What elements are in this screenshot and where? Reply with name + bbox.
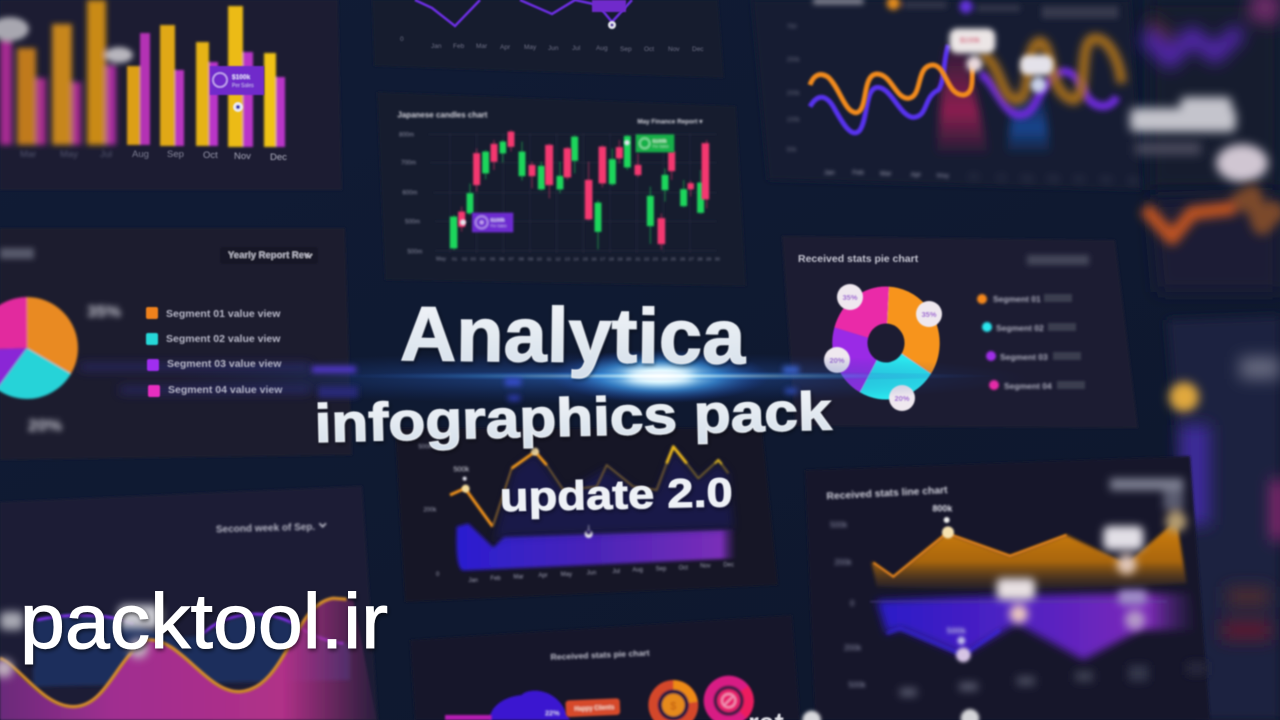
- axis labels: [830, 520, 866, 689]
- heading: Received stats pie chart: [798, 253, 919, 265]
- x axis labels: 24: [662, 257, 668, 262]
- tooltip: Per Sales: [232, 83, 254, 89]
- axis labels: May: [524, 44, 537, 51]
- orange ring icon: $: [670, 700, 677, 712]
- tooltip: $100k: [232, 74, 250, 81]
- marker: [592, 0, 626, 29]
- orange tooltip: Happy Clients: [574, 705, 615, 713]
- report dropdown: May Finance Report ▾: [637, 118, 703, 125]
- pink ring icon: [704, 676, 754, 720]
- x axis labels: 13: [565, 257, 570, 262]
- right blurred labels: [1222, 587, 1272, 640]
- axis labels: Apr: [500, 44, 511, 51]
- axis labels: Nov: [700, 564, 711, 570]
- x axis labels: 28: [697, 257, 703, 262]
- markers: 500k: [453, 465, 470, 474]
- bubbles: [824, 284, 942, 411]
- x axis labels: 06: [499, 257, 505, 262]
- x axis labels: 05: [490, 257, 496, 262]
- axis labels: 500k: [830, 520, 847, 529]
- red candles: [458, 130, 709, 249]
- month labels: Dec: [270, 152, 287, 163]
- marker: [932, 504, 954, 538]
- axis labels: Jul: [612, 569, 620, 575]
- x axis labels: [824, 169, 950, 179]
- percent label: 22%: [545, 708, 560, 717]
- orange line: [810, 63, 973, 113]
- legend: Segment 02 value view: [166, 333, 281, 345]
- bars left blurred: [0, 0, 133, 145]
- dropdown: [220, 247, 318, 264]
- bubbles: 35%: [842, 293, 858, 302]
- legend value blurs: [1044, 294, 1085, 389]
- y axis labels: 200k: [787, 91, 800, 97]
- axis labels: Oct: [644, 46, 654, 53]
- x axis labels: 26: [680, 257, 686, 262]
- purple area: [877, 593, 1197, 660]
- x axis labels: 30: [715, 257, 720, 262]
- tooltip: [210, 66, 264, 112]
- panel: top right smooth line chart: Sep: [1047, 176, 1059, 183]
- chevron: [319, 523, 326, 527]
- panel: received stats line chart: [802, 456, 1272, 720]
- blurred heading: [0, 248, 34, 259]
- y axis labels: [787, 24, 800, 154]
- x axis labels: 20: [626, 257, 632, 262]
- panel: top right smooth line chart: Dec: [1128, 177, 1141, 184]
- y axis labels: 50k: [787, 148, 796, 154]
- bubbles: 35%: [921, 310, 937, 319]
- blurred bubble: [1216, 144, 1268, 182]
- axis labels: Jun: [587, 570, 596, 576]
- x axis labels: 18: [609, 257, 614, 262]
- x axis labels: 14: [573, 257, 579, 262]
- panel: top right smooth line chart: Jul: [997, 174, 1006, 181]
- x axis labels: 07: [509, 257, 514, 262]
- axis labels: 200k: [844, 644, 861, 653]
- watermark: packtool.ir: [20, 577, 388, 665]
- panel: Japanese candles chart: [377, 92, 746, 286]
- month labels: Nov: [234, 151, 251, 162]
- x axis labels: 01: [452, 257, 458, 262]
- markers: [453, 448, 593, 538]
- x axis labels: Jan: [824, 169, 835, 176]
- x axis labels: 11: [547, 257, 552, 262]
- purple line: [415, 0, 632, 26]
- dropdown label: Second week of Sep.: [216, 522, 316, 535]
- axis labels: Jul: [572, 45, 581, 52]
- axis labels: May: [561, 572, 572, 578]
- panel: right blurred panels: [1130, 0, 1280, 720]
- purple tooltip: Per Sales: [491, 224, 507, 228]
- y axis labels: 500m: [405, 219, 420, 225]
- month labels: Mar: [20, 149, 36, 160]
- percentages: 35%: [87, 302, 121, 321]
- heading: Received stats pie chart: [550, 648, 650, 662]
- x axis labels: 04: [480, 257, 486, 262]
- x axis labels: 19: [617, 257, 623, 262]
- axis labels: Aug: [596, 45, 608, 52]
- x axis labels: 22: [644, 257, 650, 262]
- percentages: 20%: [28, 416, 62, 435]
- purple tooltip: [460, 213, 513, 232]
- x axis labels: 10: [537, 257, 542, 262]
- streak lines: [80, 364, 310, 393]
- legend: Segment 03 value view: [167, 358, 282, 370]
- x axis blurred labels: [900, 662, 1207, 696]
- title: Analytica: Analytica: [400, 291, 747, 381]
- donut: [836, 290, 936, 396]
- grid lines: [428, 133, 717, 253]
- x axis labels: 21: [635, 257, 641, 262]
- pink area: [0, 598, 377, 720]
- panel: top purple line chart: [372, 0, 724, 78]
- dark blue area behind: [32, 614, 350, 687]
- purple tooltip: $100k: [491, 217, 505, 223]
- orange ring icon: [648, 680, 698, 720]
- flare streak dashes: [312, 366, 799, 401]
- blurred column: [1180, 357, 1280, 540]
- x axis labels: [436, 256, 720, 262]
- axis labels: 500k: [418, 444, 431, 450]
- bubbles: 20%: [894, 394, 910, 403]
- legend: [813, 0, 1118, 19]
- x axis labels: May: [436, 256, 446, 262]
- panel: received stats donut: [782, 236, 1138, 428]
- month labels: Aug: [132, 149, 149, 160]
- dropdown: Yearly Report Rev.: [228, 250, 311, 261]
- axis labels: Dec: [723, 562, 734, 568]
- white bubbles: [997, 478, 1187, 630]
- lower marker: 500k: [947, 625, 966, 635]
- bubbles: [949, 28, 1053, 93]
- panel: yearly report pie: [0, 228, 352, 460]
- month labels: Jul: [100, 149, 112, 160]
- y axis labels: 100k: [787, 118, 800, 124]
- bubbles: 20%: [829, 356, 845, 365]
- blue line: [887, 628, 1000, 655]
- axis labels: Mar: [513, 575, 524, 581]
- purple line: [37, 614, 343, 643]
- panel: top right smooth line chart: $100k: [960, 36, 980, 45]
- panel: top right smooth line chart: Jun: [968, 173, 979, 180]
- y axis labels: 250k: [787, 58, 800, 64]
- x axis labels: 25: [671, 257, 676, 262]
- x axis labels: 15: [583, 257, 588, 262]
- legend: Segment 04: [1004, 381, 1052, 391]
- legend: Segment 01 value view: [166, 308, 281, 320]
- axis labels: [418, 444, 734, 584]
- bars right: [127, 6, 285, 147]
- month labels: Sep: [167, 149, 184, 160]
- orange line: [450, 447, 728, 527]
- axis labels: Oct: [679, 565, 688, 571]
- blurred sub heading: [1135, 142, 1201, 155]
- legend: Segment 04 value view: [168, 384, 283, 396]
- y axis labels: 700m: [401, 161, 416, 167]
- orange area: [872, 520, 1187, 589]
- orange tooltip: [565, 698, 620, 717]
- dark blue glow: [493, 450, 733, 543]
- axis labels: Aug: [632, 568, 643, 574]
- chart title: Received stats line chart: [826, 485, 948, 502]
- bottom dots: [802, 709, 979, 720]
- green tooltip: $100k: [653, 138, 667, 144]
- x axis labels: Apr: [911, 172, 922, 179]
- x axis labels: 09: [528, 257, 534, 262]
- lower marker: [947, 625, 971, 662]
- month labels: Oct: [203, 150, 218, 161]
- blurred orange wave: [1145, 195, 1280, 238]
- chart title: Japanese candles chart: [397, 111, 488, 120]
- x axis labels: May: [937, 172, 950, 179]
- panel: bottom left wave: [0, 486, 378, 720]
- x axis labels: 23: [653, 257, 658, 262]
- green tooltip: Per Sales: [653, 144, 669, 148]
- percentages: [28, 302, 121, 435]
- purple area: [456, 523, 735, 571]
- axis labels: Jan: [468, 578, 478, 584]
- x axis labels: 17: [600, 257, 606, 262]
- axis labels: Dec: [692, 46, 704, 53]
- x axis labels: 02: [462, 257, 468, 262]
- panel: top right smooth line chart: Aug: [1021, 175, 1033, 182]
- axis labels: Jun: [548, 45, 559, 52]
- legend: Segment 02: [996, 323, 1044, 333]
- green candles: [450, 135, 704, 250]
- panel: top right smooth line chart: [752, 0, 1142, 190]
- y axis labels: [399, 132, 422, 255]
- axis labels: Jan: [431, 43, 442, 50]
- axis labels: 200k: [423, 508, 436, 514]
- x axis labels: 12: [555, 257, 561, 262]
- panel: top right smooth line chart: Nov: [1101, 177, 1113, 184]
- zero line: [870, 601, 1167, 602]
- x axis labels: Feb: [852, 170, 864, 177]
- x axis labels: Mar: [880, 171, 892, 178]
- x axis labels: 03: [471, 257, 476, 262]
- blurred chart lines: [1145, 5, 1280, 60]
- axis labels: 0: [436, 572, 440, 578]
- month labels: [20, 149, 287, 163]
- axis labels: Mar: [476, 43, 488, 50]
- axis labels: 0: [850, 599, 855, 608]
- y axis labels: 800m: [399, 132, 414, 138]
- orange line: [873, 533, 1067, 577]
- panel: top right smooth line chart: Oct: [1074, 176, 1085, 183]
- axis labels: 0: [400, 36, 404, 43]
- axis labels: 500k: [848, 680, 866, 689]
- pie: [0, 312, 63, 384]
- axis labels: Apr: [538, 573, 548, 579]
- month labels: May: [60, 149, 78, 160]
- legend: [146, 307, 283, 397]
- purple line: [810, 45, 948, 133]
- dropdown: [1027, 255, 1089, 265]
- magenta fan: [445, 715, 492, 720]
- axis labels: Sep: [656, 567, 667, 573]
- blurred white heading: [1130, 97, 1236, 132]
- marker: 800k: [932, 504, 952, 514]
- axis labels: Feb: [490, 576, 501, 582]
- axis labels: Nov: [668, 46, 680, 53]
- subtitle: infographics pack: infographics pack: [314, 381, 833, 454]
- blurred dots: [1169, 382, 1199, 412]
- axis labels: Feb: [453, 43, 465, 50]
- axis labels: 200k: [834, 558, 852, 567]
- axis labels: Sep: [620, 46, 632, 53]
- y axis labels: 750: [787, 24, 797, 30]
- x axis labels: 08: [519, 257, 524, 262]
- panel: bar chart: [0, 0, 342, 190]
- subtitle: update 2.0: update 2.0: [499, 469, 733, 520]
- orange line: [0, 598, 347, 707]
- legend: Segment 03: [1000, 352, 1048, 362]
- panel: bottom middle pie chart: [410, 615, 800, 720]
- green tooltip: [624, 134, 674, 152]
- red and blue columns: [937, 47, 1050, 153]
- light flare: [170, 349, 1030, 404]
- purple fan: [489, 691, 570, 720]
- y axis labels: 500m: [407, 249, 422, 255]
- x axis labels: 16: [591, 257, 597, 262]
- legend: Segment 01: [993, 294, 1041, 304]
- legend: [977, 294, 1052, 391]
- blurred bubbles: [0, 605, 162, 678]
- panel: mid line chart: [395, 428, 778, 602]
- x axis labels: 27: [689, 257, 694, 262]
- x axis labels: 29: [706, 257, 712, 262]
- y axis labels: 600m: [402, 191, 417, 197]
- axis labels: [400, 36, 704, 53]
